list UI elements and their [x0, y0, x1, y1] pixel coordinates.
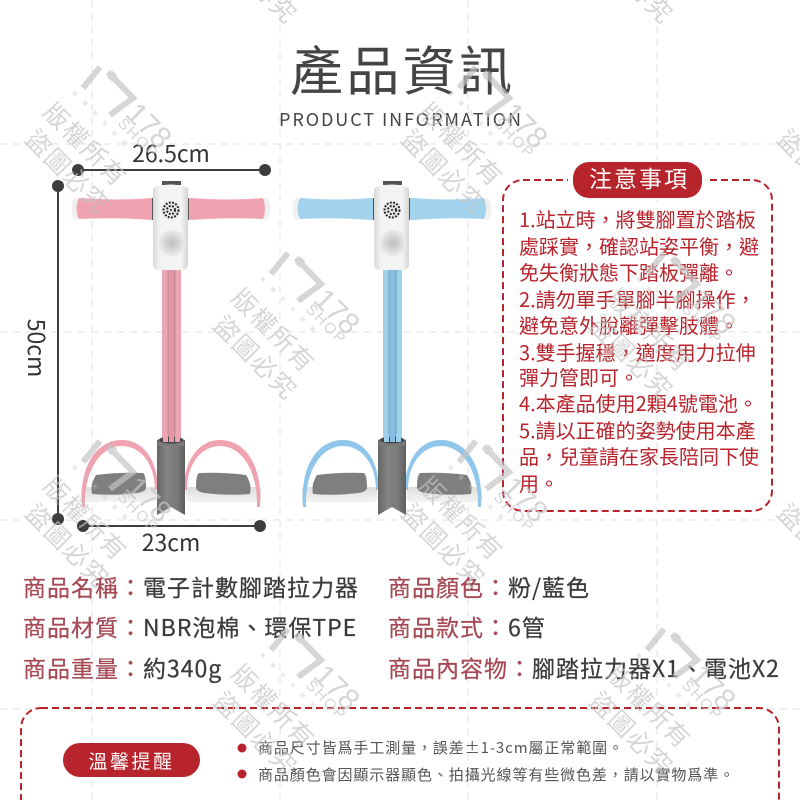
- precautions text: 4.本產品使用2顆4號電池。: [519, 388, 758, 417]
- watermarks: 版權所有: [600, 656, 700, 756]
- precautions text: [519, 204, 759, 497]
- watermarks: 版權所有盜圖: [259, 651, 323, 716]
- precautions heading: [568, 160, 707, 200]
- watermarks: SHOP: [678, 301, 726, 349]
- height dimension: 50cm: 50cm: [21, 319, 55, 377]
- handles: [292, 198, 492, 220]
- watermarks: 版權所有盜圖: [447, 463, 511, 528]
- watermarks: 178: [495, 471, 554, 529]
- product: pink pull-up trainer: [72, 181, 270, 515]
- watermarks: 版權所有: [412, 94, 512, 194]
- product specifications: [23, 569, 780, 684]
- tubes: [383, 268, 402, 443]
- base dimension: 23cm: [77, 520, 266, 558]
- precautions heading: 注意事項: [589, 160, 687, 194]
- panel: precautions: [503, 160, 772, 511]
- width dimension: 26.5cm: [72, 135, 271, 176]
- reminder item 2: 商品顏色會因顯示器顯色、拍攝光線等有些微色差，請以實物爲準。: [258, 764, 735, 785]
- title: 產品資訊: [290, 30, 512, 106]
- spec: style: 商品款式：6管: [388, 609, 546, 643]
- height dimension: 50cm: [21, 180, 64, 525]
- control body: [153, 181, 188, 270]
- watermarks: 178: [495, 97, 554, 155]
- watermarks: 版權所有盜圖: [635, 275, 699, 340]
- watermarks: SHOP: [302, 677, 350, 725]
- spec: material: 商品材質：NBR泡棉、環保TPE: [23, 609, 357, 643]
- control body: [374, 181, 409, 270]
- spec: name: 商品名稱：電子計數腳踏拉力器: [23, 569, 359, 603]
- watermarks: SHOP: [490, 489, 538, 537]
- precautions text: 處踩實，確認站姿平衡，避: [519, 231, 759, 260]
- watermarks: 盜圖必究: [582, 307, 682, 407]
- watermarks: 版權所有盜圖: [447, 89, 511, 154]
- watermarks: 盜圖必究: [18, 121, 118, 221]
- spec: weight: 商品重量：約340g: [23, 650, 222, 684]
- watermarks: 178: [307, 659, 366, 717]
- watermarks: SHOP: [114, 489, 162, 537]
- precautions text: 5.請以正確的姿勢使用本產: [519, 415, 756, 444]
- sleeve: [378, 434, 406, 515]
- foot straps: [303, 440, 481, 507]
- precautions text: 避免意外脫離彈擊肢體。: [519, 310, 739, 339]
- watermarks: SHOP: [490, 115, 538, 163]
- watermarks: 版權所有: [36, 94, 136, 194]
- watermarks: 版權所有: [36, 468, 136, 568]
- watermarks: 版權所有盜圖: [259, 275, 323, 340]
- precautions text: 免失衡狀態下踏板彈離。: [519, 257, 739, 286]
- width dimension: 26.5cm: 26.5cm: [132, 135, 210, 169]
- watermarks: 版權所有: [224, 656, 324, 756]
- watermarks: 盜圖必究: [394, 495, 494, 595]
- watermarks: 版權所有盜圖: [71, 463, 135, 528]
- watermarks: SHOP: [114, 115, 162, 163]
- panel: warm reminder: [21, 708, 779, 800]
- precautions text: 用。: [519, 468, 559, 497]
- tubes: [162, 268, 181, 443]
- watermarks: SHOP: [678, 677, 726, 725]
- watermarks: 版權所有盜圖: [71, 89, 135, 154]
- foot pedals: [81, 473, 261, 502]
- watermarks: 178: [119, 471, 178, 529]
- precautions text: 彈力管即可。: [519, 362, 639, 391]
- precautions text: 1.站立時，將雙腳置於踏板: [519, 204, 756, 233]
- foot pedals: [302, 473, 482, 502]
- watermarks: 版權所有: [224, 280, 324, 380]
- watermarks: 盜圖必究: [18, 495, 118, 595]
- watermarks: 178: [683, 283, 742, 341]
- precautions text: 2.請勿單手單腳半腳操作，: [519, 284, 756, 313]
- handles: [72, 198, 270, 220]
- watermarks: SHOP: [302, 301, 350, 349]
- watermarks: 盜圖必究: [394, 121, 494, 221]
- watermarks: 178: [683, 659, 742, 717]
- watermarks: 盜圖必究: [206, 683, 306, 783]
- foot straps: [82, 440, 260, 507]
- precautions text: 品，兒童請在家長陪同下使: [519, 441, 759, 470]
- precautions text: 3.雙手握穩，適度用力拉伸: [519, 337, 756, 366]
- product: blue pull-up trainer: [292, 181, 492, 515]
- watermarks: 版權所有盜圖: [635, 651, 699, 716]
- watermarks: 盜圖必究: [582, 683, 682, 783]
- subtitle: PRODUCT INFORMATION: [279, 106, 521, 132]
- watermarks: 版權所有: [412, 468, 512, 568]
- watermarks: 版權所有: [600, 280, 700, 380]
- spec: colour: 商品顏色：粉/藍色: [388, 569, 590, 603]
- watermarks: 盜圖必究: [206, 307, 306, 407]
- reminder item 1: 商品尺寸皆爲手工測量，誤差±1-3cm屬正常範圍。: [258, 737, 624, 758]
- sleeve: [157, 434, 185, 515]
- base dimension: 23cm: 23cm: [142, 524, 200, 558]
- watermarks: 178: [119, 97, 178, 155]
- watermarks: 178: [307, 283, 366, 341]
- reminder badge: [63, 743, 200, 777]
- spec: contents: 商品內容物：腳踏拉力器X1、電池X2: [388, 650, 780, 684]
- reminder badge: 溫馨提醒: [88, 747, 175, 774]
